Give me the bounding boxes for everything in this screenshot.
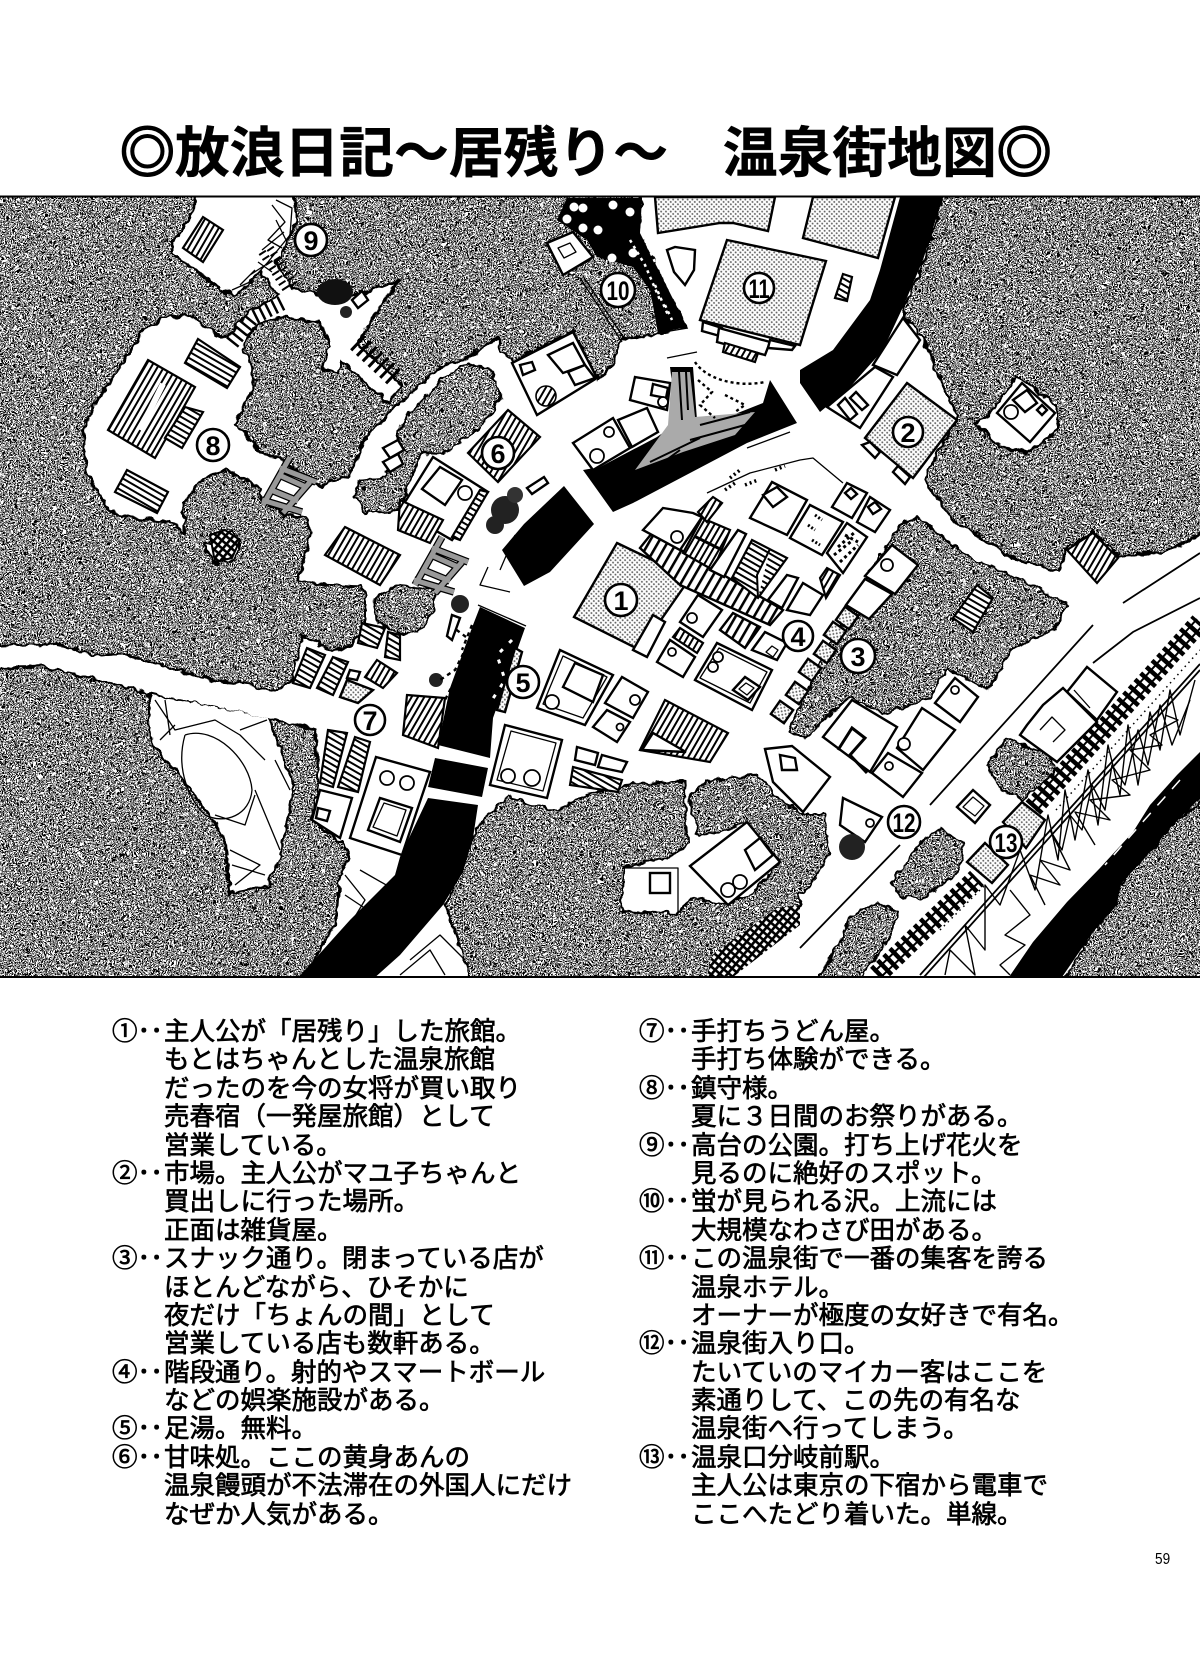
location markers (197, 224, 1022, 858)
small hut in the forest (210, 530, 240, 562)
item 8 (639, 1074, 1023, 1131)
item 12: 温泉街へ行ってしまう。 (691, 1415, 969, 1443)
item 7 (639, 1018, 946, 1074)
central block: bathhouse 1 (574, 543, 690, 657)
map top rule (0, 196, 1200, 198)
south-east river (1007, 752, 1200, 980)
item 3: 営業している店も数軒ある。 (164, 1330, 495, 1358)
item 9: 見るのに絶好のスポット。 (691, 1160, 996, 1188)
item 6: 温泉饅頭が不法滞在の外国人にだけ (164, 1472, 572, 1500)
item 13: ここへたどり着いた。単線。 (691, 1501, 1023, 1529)
item 13: 主人公は東京の下宿から電車で (691, 1472, 1048, 1500)
central block hatched roofs (640, 458, 890, 625)
text: ⑦･･ (639, 1018, 690, 1046)
item 5: 足湯。無料。 (164, 1415, 317, 1443)
park 9 building and rocks (183, 200, 295, 292)
east town houses (765, 678, 990, 860)
item 1: もとはちゃんとした温泉旅館 (164, 1046, 495, 1074)
rock formations (155, 700, 465, 975)
hotel grounds: building 11 (655, 197, 895, 362)
item 1: 売春宿（一発屋旅館）として (164, 1103, 495, 1131)
hatched house in east forest (953, 585, 993, 632)
item 7: 手打ちうどん屋。 (691, 1018, 895, 1046)
text: ④･･ (112, 1359, 163, 1387)
text: ③･･ (112, 1245, 163, 1273)
clearing 8 shrine buildings (108, 339, 240, 513)
item 10: 蛍が見られる沢。上流には (691, 1188, 997, 1216)
location markers: 8 (205, 431, 221, 461)
item 7: 手打ち体験ができる。 (691, 1046, 946, 1074)
item 2 (112, 1160, 521, 1245)
location markers: 4 (790, 622, 806, 652)
location markers: 12 (892, 808, 916, 838)
location markers: 7 (362, 706, 378, 736)
buildings on the fork (573, 377, 670, 470)
snack street tone shops (771, 607, 858, 723)
torii gate lower (262, 457, 316, 513)
item 3 (112, 1244, 544, 1358)
text: ⑨･･ (639, 1132, 690, 1160)
west street row houses (293, 527, 430, 855)
trackside houses (1020, 667, 1117, 762)
legend left column (112, 1018, 572, 1529)
street buildings near 4 (657, 545, 918, 710)
item 3: スナック通り。閉まっている店が (164, 1245, 544, 1273)
item 13 (639, 1444, 1048, 1529)
river: upper right (800, 197, 943, 412)
location markers: 3 (850, 642, 866, 672)
item 11: 温泉ホテル。 (691, 1274, 844, 1302)
garden shrub (480, 477, 548, 592)
item 13: 温泉口分岐前駅。 (691, 1444, 895, 1472)
cross-hatch embankment (707, 905, 800, 977)
item 6: 甘味処。ここの黄身あんの (164, 1444, 470, 1472)
item 8: 夏に３日間のお祭りがある。 (691, 1103, 1023, 1131)
text: ⑧･･ (639, 1075, 690, 1103)
item 3: ほとんどながら、ひそかに (164, 1274, 469, 1302)
text: ⑥･･ (112, 1444, 163, 1472)
item 1: 主人公が「居残り」した旅館。 (164, 1018, 521, 1046)
text: ⑫･･ (639, 1330, 690, 1358)
river bank shrubs (429, 595, 472, 700)
forest and roads base (0, 180, 1200, 1000)
text: ⑪･･ (639, 1245, 690, 1273)
title: ◎放浪日記～居残り～ 温泉街地図◎ (120, 122, 1052, 184)
location markers: 11 (748, 274, 770, 304)
rock scribbles along river (945, 680, 1195, 975)
text: ⑩･･ (639, 1188, 690, 1216)
item 12: たいていのマイカー客はここを (691, 1359, 1047, 1387)
item 8: 鎮守様。 (691, 1075, 793, 1103)
torii gate upper (414, 537, 468, 593)
location markers: 1 (613, 586, 629, 616)
item 11: この温泉街で一番の集客を誇る (691, 1245, 1048, 1273)
location markers: 2 (900, 418, 916, 448)
river: main channel (296, 605, 526, 980)
item 12: 素通りして、この先の有名な (691, 1387, 1020, 1415)
text: ⑤･･ (112, 1415, 163, 1443)
item 1: だったのを今の女将が買い取り (164, 1075, 521, 1103)
item 12: 温泉街入り口。 (691, 1330, 870, 1358)
west town buildings (383, 332, 597, 543)
forest house (997, 383, 1055, 442)
creek with fireflies (547, 198, 688, 342)
item 2: 市場。主人公がマユ子ちゃんと (164, 1160, 521, 1188)
item 2: 正面は雑貨屋。 (164, 1217, 343, 1245)
river: pond by bathhouse (502, 486, 594, 586)
location markers: 5 (515, 668, 531, 698)
footbath block buildings (403, 648, 728, 798)
item 6: なぜか人気がある。 (164, 1501, 394, 1529)
text: ①･･ (112, 1018, 163, 1046)
item 10 (639, 1188, 997, 1245)
item 4: 階段通り。射的やスマートボール (164, 1359, 545, 1387)
road lines (800, 553, 1200, 977)
item 11 (639, 1244, 1074, 1330)
river: central fork (583, 352, 797, 512)
map bottom rule (0, 976, 1200, 978)
item 3: 夜だけ「ちょんの間」として (164, 1302, 495, 1330)
item 9: 高台の公園。打ち上げ花火を (691, 1132, 1023, 1160)
item 6 (112, 1444, 572, 1529)
item 1: 営業している。 (164, 1132, 342, 1160)
page number: 59 (1155, 1551, 1170, 1568)
text: ②･･ (112, 1160, 163, 1188)
location markers: 10 (606, 276, 630, 306)
item 10: 大規模なわさび田がある。 (691, 1217, 997, 1245)
item 9 (639, 1132, 1023, 1188)
item 1 (112, 1018, 521, 1160)
item 11: オーナーが極度の女好きで有名。 (691, 1302, 1074, 1330)
stairs (232, 303, 397, 380)
south houses on lawn (622, 822, 780, 915)
railway tracks (874, 619, 1200, 978)
location markers: 6 (490, 439, 506, 469)
hatched roof house (1067, 533, 1118, 583)
item 4: などの娯楽施設がある。 (164, 1387, 445, 1415)
item 2: 買出しに行った場所。 (164, 1188, 419, 1216)
map (0, 196, 1200, 978)
location markers: 13 (994, 828, 1018, 858)
location markers: 9 (303, 226, 319, 256)
pond shrine (317, 279, 368, 318)
legend right column (639, 1018, 1074, 1529)
item 4 (112, 1358, 545, 1415)
station platforms (967, 802, 1045, 883)
item 12 (639, 1330, 1047, 1443)
text: ⑬･･ (639, 1444, 690, 1472)
market 2 (827, 318, 957, 484)
